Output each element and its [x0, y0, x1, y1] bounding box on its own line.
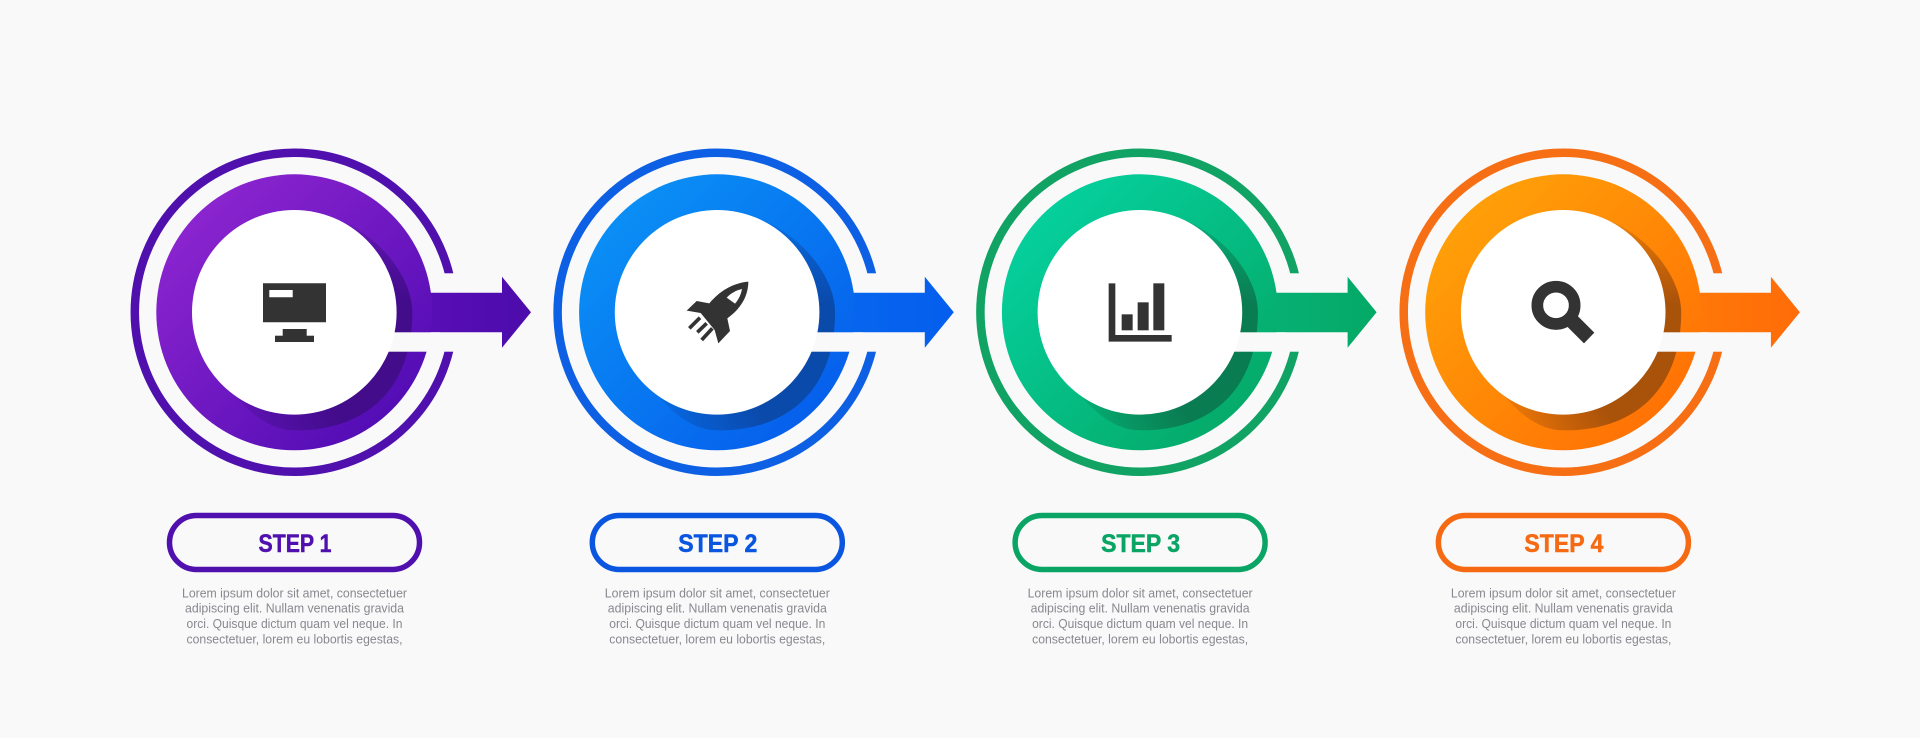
arrow: step 2	[813, 277, 954, 348]
label pill: step 4	[1438, 516, 1688, 570]
text block: step 4: adipiscing elit. Nullam venenatis gravida	[1454, 601, 1674, 616]
label pill: step 4: STEP 4	[1524, 530, 1603, 558]
text block: step 1: adipiscing elit. Nullam venenatis gravida	[185, 601, 405, 616]
arrow: step 3	[1236, 277, 1377, 348]
text block: step 2: Lorem ipsum dolor sit amet, consectetuer	[605, 585, 830, 600]
panel: step 3	[980, 153, 1377, 646]
circle with arrow: step 2	[558, 153, 954, 472]
icon: rocket	[687, 282, 748, 343]
text block: step 2: orci. Quisque dictum quam vel neque. In	[609, 616, 825, 631]
text block: step 4: Lorem ipsum dolor sit amet, consectetuer	[1451, 585, 1677, 600]
panel: step 4	[1404, 153, 1800, 646]
text block: step 1	[182, 585, 408, 646]
icon: monitor	[263, 283, 326, 342]
text block: step 2	[605, 585, 830, 646]
text block: step 4: consectetuer, lorem eu lobortis egestas,	[1455, 631, 1671, 646]
circle with arrow: step 1	[135, 153, 531, 472]
text block: step 1: orci. Quisque dictum quam vel neque. In	[186, 616, 402, 631]
text block: step 3: orci. Quisque dictum quam vel neque. In	[1032, 616, 1248, 631]
text block: step 3	[1028, 585, 1253, 646]
panel: step 1	[135, 153, 531, 646]
text block: step 3: consectetuer, lorem eu lobortis egestas,	[1032, 631, 1248, 646]
label pill: step 3	[1015, 516, 1265, 570]
circle with arrow: step 3	[980, 153, 1377, 472]
arrow: step 1	[390, 277, 531, 348]
label pill: step 2	[592, 516, 842, 570]
label pill: step 2: STEP 2	[678, 530, 757, 558]
label pill: step 1	[170, 516, 420, 570]
circle with arrow: step 4	[1404, 153, 1800, 472]
text block: step 3: Lorem ipsum dolor sit amet, consectetuer	[1028, 585, 1253, 600]
label pill: step 1: STEP 1	[258, 530, 332, 558]
panel: step 2	[558, 153, 954, 646]
text block: step 4	[1451, 585, 1677, 646]
text block: step 4: orci. Quisque dictum quam vel neque. In	[1455, 616, 1671, 631]
text block: step 1: Lorem ipsum dolor sit amet, consectetuer	[182, 585, 408, 600]
text block: step 3: adipiscing elit. Nullam venenatis gravida	[1031, 601, 1250, 616]
arrow: step 4	[1659, 277, 1800, 348]
icon: magnifier	[1537, 287, 1594, 343]
label pill: step 3: STEP 3	[1101, 530, 1180, 558]
icon: bar chart	[1109, 283, 1172, 342]
text block: step 1: consectetuer, lorem eu lobortis egestas,	[186, 631, 402, 646]
text block: step 2: consectetuer, lorem eu lobortis egestas,	[609, 631, 825, 646]
text block: step 2: adipiscing elit. Nullam venenatis gravida	[608, 601, 828, 616]
